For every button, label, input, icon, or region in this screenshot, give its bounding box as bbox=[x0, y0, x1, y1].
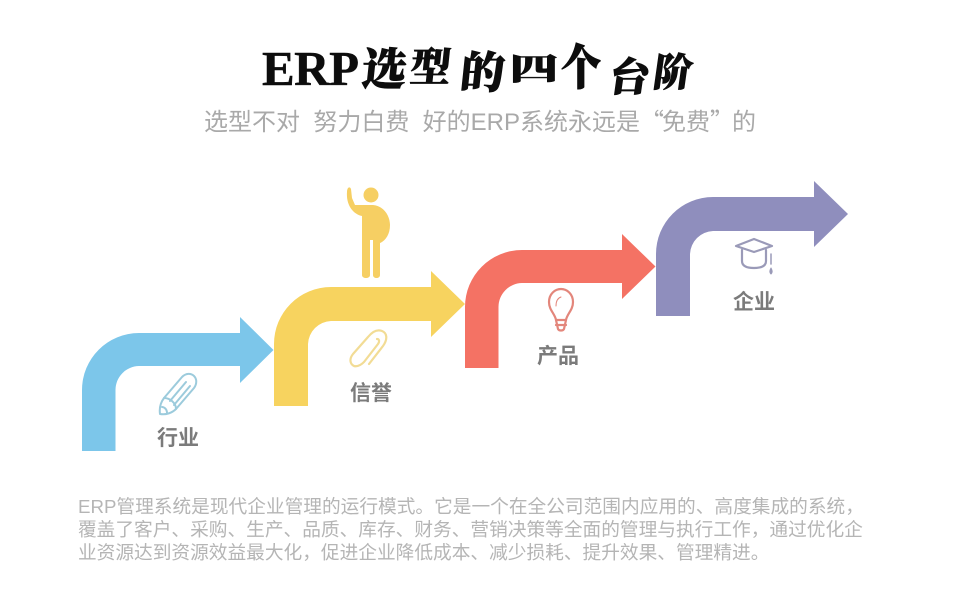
description paragraph: ERP管理系统是现代企业管理的运行模式。它是一个在全公司范围内应用的、高度集成的系统， bbox=[78, 496, 864, 517]
description paragraph bbox=[78, 496, 864, 563]
title: 阶 bbox=[650, 42, 697, 98]
label: 信誉: 信誉 bbox=[350, 382, 392, 405]
arrow: 产品 bbox=[465, 234, 656, 368]
title: 选 bbox=[359, 33, 410, 98]
arrow: 信誉 bbox=[274, 271, 465, 406]
arrow: 行业 bbox=[82, 317, 274, 451]
arrow: 企业 bbox=[656, 181, 848, 316]
subtitle: 选型不对 努力白费 好的ERP系统永远是“免费”的 bbox=[204, 102, 756, 137]
title: 的 bbox=[458, 37, 508, 101]
icon: light bulb bbox=[549, 289, 573, 330]
icon: person waving bbox=[347, 187, 390, 278]
title: 型 bbox=[408, 36, 454, 93]
description paragraph: 覆盖了客户、采购、生产、品质、库存、财务、营销决策等全面的管理与执行工作，通过优化企 bbox=[78, 519, 863, 540]
description paragraph: 业资源达到资源效益最大化，促进企业降低成本、减少损耗、提升效果、管理精进。 bbox=[78, 542, 769, 563]
title: 个 bbox=[561, 30, 601, 99]
icon: graduation cap bbox=[736, 239, 772, 274]
title: 台 bbox=[606, 46, 654, 103]
title bbox=[262, 30, 697, 103]
label: 企业: 企业 bbox=[733, 291, 775, 314]
icon: paperclip bbox=[350, 330, 386, 366]
label: 行业: 行业 bbox=[157, 427, 199, 450]
title: 四 bbox=[509, 45, 559, 89]
icon: pencil bbox=[160, 374, 196, 414]
title: ERP bbox=[262, 41, 358, 96]
label: 产品: 产品 bbox=[537, 345, 579, 368]
